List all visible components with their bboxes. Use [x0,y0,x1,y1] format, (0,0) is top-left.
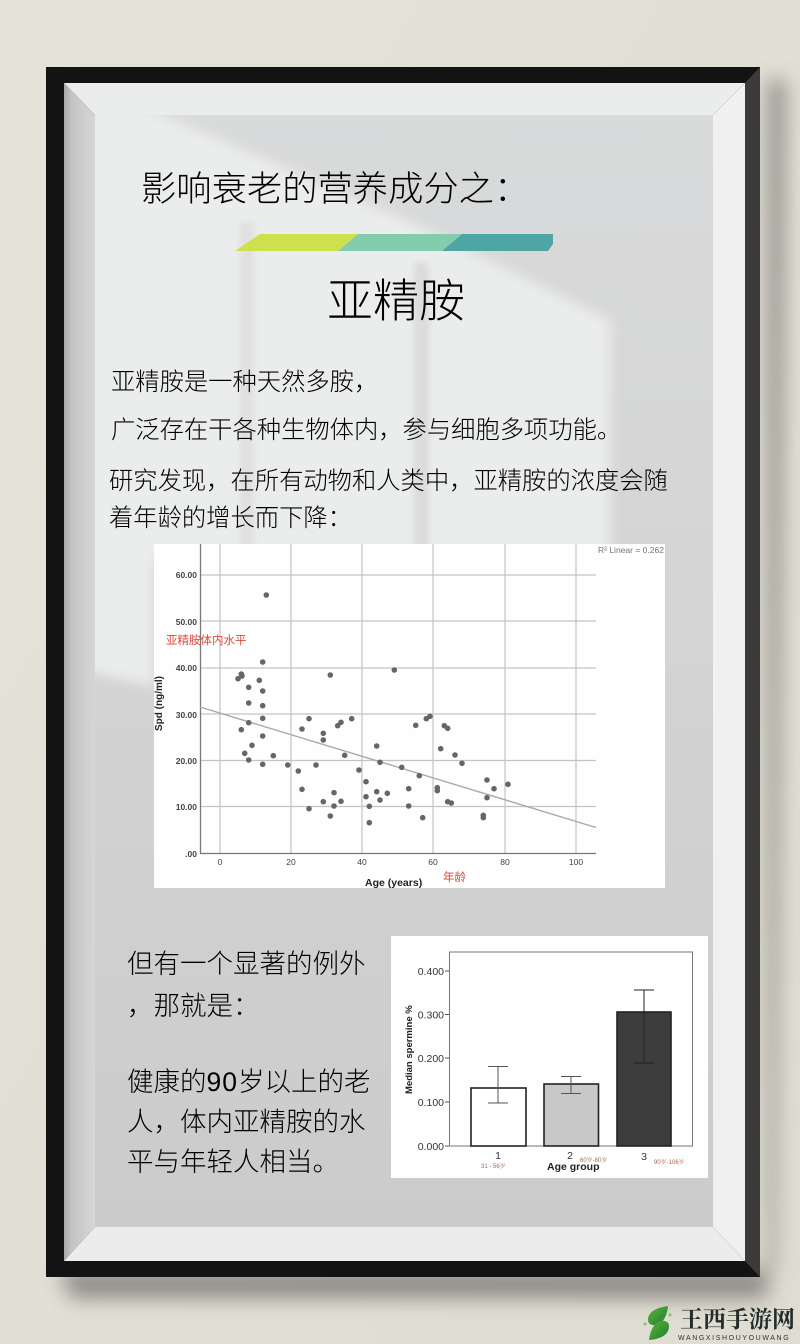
exception text block: ，那就是： [127,991,260,1021]
y tick labels: 0.100 [418,1097,444,1109]
x tick labels: 3 [641,1151,647,1163]
watermark logo [643,1306,795,1342]
red age labels: 60岁-80岁 [580,1156,607,1164]
x tick labels [218,857,583,867]
subtitle: 亚精胺 [327,275,465,327]
y tick labels: 0.000 [418,1141,444,1153]
mat: top [64,83,745,115]
y tick labels: 10.00 [176,802,197,812]
y tick labels: 0.400 [418,966,444,978]
chart background [154,544,665,888]
plot box [450,952,692,1146]
y tick labels: 30.00 [176,710,197,720]
exception text block: 但有一个显著的例外 [127,949,366,979]
exception text block: 人，体内亚精胺的水 [127,1107,366,1137]
intro text block: 亚精胺是一种天然多胺， [111,369,378,396]
mat: left [64,83,95,1261]
red age labels: 90岁-106岁 [654,1158,685,1166]
scatter chart: spermidine vs age [154,544,665,889]
x tick labels: 1 [495,1150,501,1162]
y ticks [445,971,449,1146]
error bars [488,990,654,1103]
title: 影响衰老的营养成分之： [141,170,529,209]
frame: right bevel [745,67,760,1277]
chart background [391,936,708,1178]
x axis title: Age group [547,1161,600,1173]
y tick labels: 0.200 [418,1053,444,1065]
x tick labels: 100 [569,857,583,867]
mat: right [713,83,745,1261]
y tick labels: 20.00 [176,756,197,766]
bar chart: median spermine by age group [391,936,708,1178]
tricolor divider [235,234,553,251]
panel: lit window area [70,105,610,686]
y tick labels: 0.300 [418,1010,444,1022]
y tick labels: 40.00 [176,663,197,673]
intro text block: 研究发现，在所有动物和人类中，亚精胺的浓度会随 [109,468,668,495]
y tick labels: 50.00 [176,617,197,627]
grid lines [200,544,596,853]
x tick labels: 60 [428,857,438,867]
y tick labels [176,570,197,859]
logo pinyin: WANGXISHOUYOUWANG [678,1335,790,1342]
red age labels [481,1156,685,1170]
intro text block: 着年龄的增长而下降： [109,505,352,532]
inner panel with window light [70,105,713,1227]
data points [235,592,511,826]
bar 1 [471,1088,526,1146]
x tick labels: 40 [357,857,367,867]
y tick labels [418,966,444,1153]
y tick labels: 60.00 [176,570,197,580]
bar 2 [544,1084,598,1146]
axes [200,544,596,854]
red label: level: 亚精胺体内水平 [166,633,246,647]
intro text block [109,369,668,532]
red age labels: 31 - 56岁 [481,1162,506,1170]
bar 3 [617,1012,671,1146]
trend line [200,707,596,828]
x tick labels: 0 [218,857,223,867]
icon: leaf S [643,1306,672,1340]
red label: age: 年龄 [443,870,466,884]
x axis title: Age (years) [365,877,422,889]
exception text block [127,949,370,1177]
x tick labels: 2 [567,1150,573,1162]
panel: base [95,115,713,1227]
panel: window mullion left [242,224,252,544]
panel: window mullion centre [414,262,429,552]
exception text block: 平与年轻人相当。 [127,1147,339,1177]
logo name: 王西手游网 [680,1307,795,1332]
x tick labels: 80 [500,857,510,867]
mat: bottom [64,1227,745,1261]
x tick labels [495,1150,647,1163]
y tick labels: .00 [185,849,197,859]
exception text block: 健康的90岁以上的老 [127,1067,370,1097]
intro text block: 广泛存在干各种生物体内，参与细胞多项功能。 [111,417,621,444]
r squared label: R² Linear = 0.262 [598,545,664,555]
y axis title: Spd (ng/ml) [154,676,165,731]
x tick labels: 20 [286,857,296,867]
y axis title: Median spermine % [404,1005,415,1094]
